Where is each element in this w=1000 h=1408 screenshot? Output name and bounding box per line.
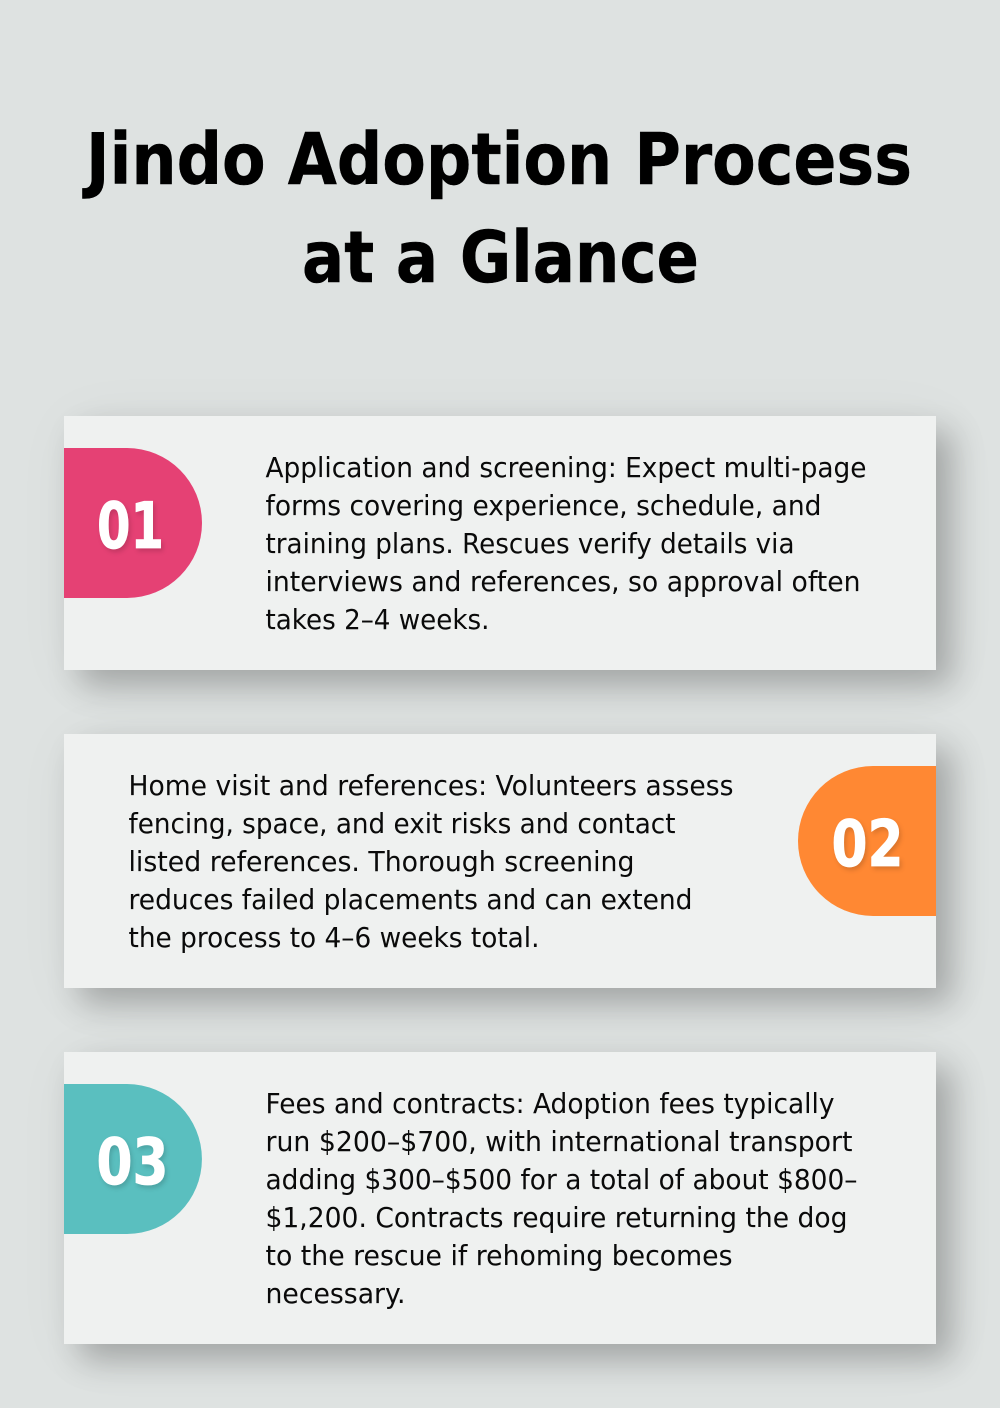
badge: 03	[64, 1084, 202, 1234]
text block: step 1: takes 2–4 weeks.	[266, 603, 490, 636]
badge: 01: 01	[97, 490, 164, 564]
text block: step 2: the process to 4–6 weeks total.	[128, 921, 540, 954]
text block: step 2: reduces failed placements and can extend	[128, 883, 692, 916]
badge: 01	[64, 448, 202, 598]
panel: step 3 fees and contracts	[64, 1052, 936, 1344]
text block: step 3: $1,200. Contracts require returning the dog	[266, 1201, 848, 1234]
text block: step 3: to the rescue if rehoming becomes	[266, 1239, 732, 1272]
text block: step 2: listed references. Thorough screening	[128, 845, 634, 878]
text block: step 2	[128, 769, 734, 954]
text block: step 1: Application and screening: Expect multi-page	[266, 451, 866, 484]
panel: step 2 home visit and references	[64, 734, 936, 988]
badge: 03: 03	[96, 1126, 168, 1200]
text block: step 1	[266, 451, 866, 636]
badge: 02: 02	[832, 808, 904, 882]
text block: step 1: interviews and references, so approval often	[266, 565, 860, 598]
text block: step 1: forms covering experience, schedule, and	[266, 489, 822, 522]
text block: step 1: training plans. Rescues verify details via	[266, 527, 794, 560]
title: at a Glance	[302, 216, 699, 299]
text block: step 3: adding $300–$500 for a total of about $800–	[266, 1163, 858, 1196]
panel: step 1 application and screening	[64, 416, 936, 670]
text block: step 3	[266, 1087, 858, 1310]
badge: 02	[798, 766, 936, 916]
text block: step 2: fencing, space, and exit risks and contact	[128, 807, 676, 840]
text block: step 3: Fees and contracts: Adoption fees typically	[266, 1087, 834, 1120]
text block: step 3: run $200–$700, with international transport	[266, 1125, 853, 1158]
title	[82, 118, 912, 299]
text block: step 3: necessary.	[266, 1277, 406, 1310]
text block: step 2: Home visit and references: Volunteers assess	[128, 769, 734, 802]
title: Jindo Adoption Process	[82, 118, 912, 201]
